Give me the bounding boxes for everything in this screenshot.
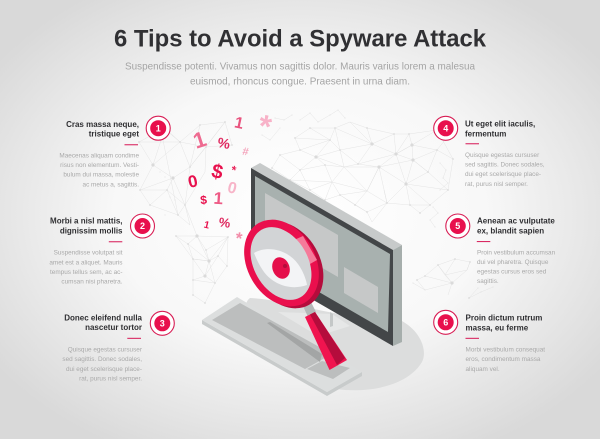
tip 2	[49, 214, 154, 285]
floating characters	[186, 107, 275, 248]
icon: number 6: 6	[443, 318, 448, 328]
floating characters: 1	[203, 220, 211, 232]
monitor shadow	[246, 298, 424, 390]
tip 2: amet est a aliquet. Mauris	[49, 259, 122, 266]
tip 5: sagittis.	[477, 278, 499, 285]
tip 6: aliquam vel.	[466, 366, 500, 373]
tip 1: Cras massa neque,	[66, 120, 139, 129]
floating characters: $	[210, 160, 225, 184]
tip 4: dui eget scelerisque place-	[465, 171, 541, 178]
tip 6: Proin dictum rutrum	[466, 314, 542, 323]
tip 1	[59, 116, 170, 188]
tip 4	[434, 116, 545, 188]
tip 3: rat, purus nisl semper.	[79, 375, 142, 382]
keyboard	[202, 297, 362, 396]
subtitle: Suspendisse potenti. Vivamus non sagittis dolor. Mauris varius lorem a malesua	[125, 62, 475, 72]
monitor	[251, 163, 402, 346]
tip 3: sed sagittis. Donec sodales,	[62, 356, 142, 363]
floating characters: %	[218, 214, 232, 231]
icon: number 4: 4	[443, 124, 448, 134]
handle	[303, 302, 347, 370]
tip 4: sed sagittis. Donec sodales,	[465, 162, 545, 169]
tip 1: ac metus a, sagittis.	[83, 181, 139, 188]
tip 5: egestas cursus eros sed	[477, 269, 547, 276]
tip 5: Aenean ac vulputate	[477, 217, 555, 226]
screen panel: large window	[265, 193, 338, 277]
tip 1: risus non elementum. Vesti-	[60, 162, 139, 169]
tip 5: dui vel pharetra. Quisque	[477, 259, 549, 266]
tip 2: Suspendisse volutpat sit	[54, 250, 123, 257]
eye	[254, 249, 307, 287]
title: 6 Tips to Avoid a Spyware Attack	[114, 26, 487, 52]
tip 3	[62, 311, 174, 382]
tip 3: Donec eleifend nulla	[64, 314, 143, 322]
icon: number 2: 2	[140, 221, 145, 231]
tip 1: bulum dui massa, molestie	[63, 172, 139, 179]
icon: number 3: 3	[160, 318, 165, 328]
tip 5: Proin vestibulum accumsan	[477, 250, 556, 256]
tip 2: tempus tellus sem, ac ac-	[50, 269, 122, 276]
tip 3: Quisque egestas cursuser	[68, 346, 143, 354]
tip 3: dui eget scelerisque place-	[66, 366, 142, 373]
tip 6: eros, condimentum massa	[466, 356, 541, 363]
screen panel: small window	[344, 267, 378, 313]
floating characters: $	[200, 193, 208, 207]
floating characters: 0	[226, 179, 239, 198]
floating characters: 1	[233, 114, 245, 133]
world map network	[139, 110, 493, 303]
floating characters: 1	[213, 189, 224, 208]
floating characters: #	[242, 146, 249, 158]
floating characters: 1	[190, 126, 209, 154]
icon: number 5: 5	[455, 221, 460, 231]
tip 6	[434, 310, 545, 373]
magnifying glass	[229, 206, 347, 370]
tip 4: Ut eget elit iaculis,	[465, 120, 535, 129]
monitor stand	[278, 312, 350, 336]
floating characters: *	[256, 107, 275, 145]
floating characters: *	[234, 229, 244, 248]
tip 4: rat, purus nisl semper.	[465, 181, 528, 188]
tip 5: ex, blandit sapien	[477, 226, 544, 235]
tip 2: dignissim mollis	[60, 226, 123, 235]
map nodes	[139, 110, 493, 303]
tip 2: cumsan nisi pharetra.	[61, 278, 123, 285]
tip 6: massa, eu ferme	[466, 323, 529, 332]
tip 4: fermentum	[465, 129, 506, 138]
subtitle: euismod, rhoncus congue. Praesent in urna diam.	[190, 76, 410, 88]
tip 2: Morbi a nisl mattis,	[50, 217, 122, 226]
floating characters: *	[230, 163, 238, 177]
tip 1: tristique eget	[89, 130, 139, 139]
tip 4: Quisque egestas cursuser	[465, 152, 540, 159]
tip 3: nascetur tortor	[85, 323, 142, 332]
floating characters: 0	[186, 171, 199, 192]
icon: number 1: 1	[156, 123, 161, 133]
tip 5	[446, 214, 556, 285]
floating characters: %	[216, 134, 232, 152]
tip 6: Morbi vestibulum consequat	[466, 346, 545, 354]
tip 1: Maecenas aliquam condime	[59, 152, 139, 159]
subtitle	[125, 62, 475, 88]
